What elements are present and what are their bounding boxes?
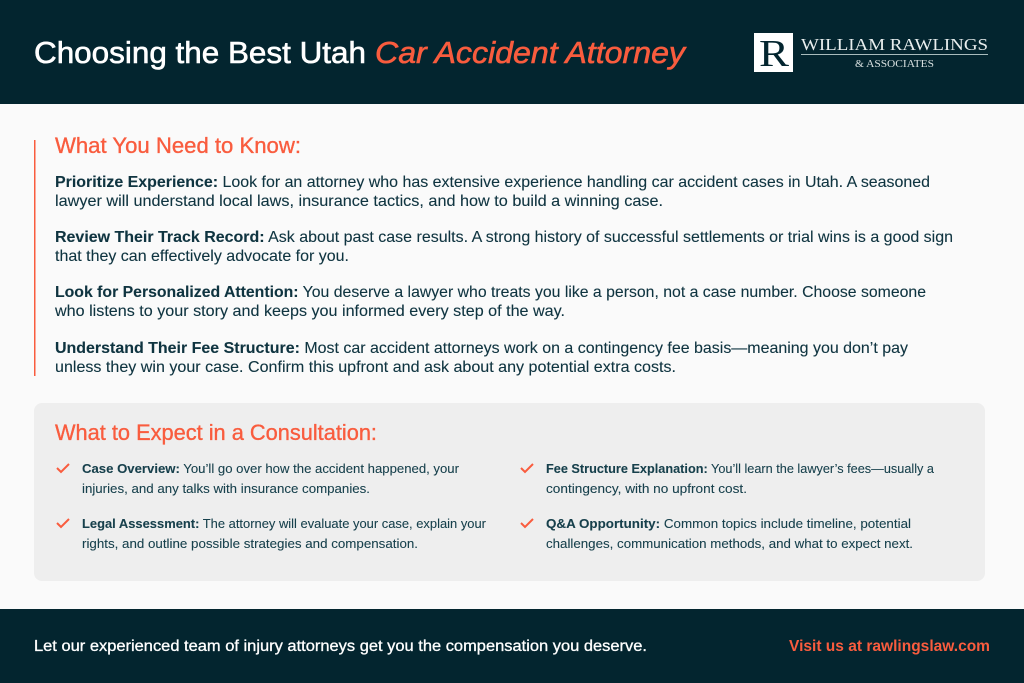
heading: What to Expect in a Consultation: [55,420,377,445]
item: case overview: Case Overview: You’ll go over how the accident happened, your [82,461,460,476]
item: q&a opportunity: challenges, communication methods, and what to expect next. [546,536,913,551]
item: prioritize experience [55,174,930,210]
title: Car Accident Attorney [375,35,688,70]
footer link: Visit us at rawlingslaw.com [789,638,990,655]
panel: what you need to know [34,133,953,376]
item: legal assessment [57,516,487,551]
item: fee structure explanation [521,461,935,496]
item: review track record: Review Their Track Record: Ask about past case results. A strong history of successful settlements or trial wins is a good sign [55,229,953,246]
item: prioritize experience: Prioritize Experience: Look for an attorney who has extensive experience handling car accident cases in Utah. A seasoned [55,174,930,191]
icon: check [521,519,533,527]
item: personalized attention: who listens to your story and keeps you informed every step of the way. [54,303,565,320]
item: fee structure explanation: contingency, with no upfront cost. [546,481,747,496]
accent rule [34,140,36,376]
item: personalized attention: Look for Personalized Attention: You deserve a lawyer who treats you like a person, not a case number. Choose someone [55,284,926,301]
footer message: Let our experienced team of injury attorneys get you the compensation you deserve. [34,638,647,655]
title: Choosing the Best Utah [34,35,366,70]
item: fee structure: unless they win your case. Confirm this upfront and ask about any potential extra costs. [55,359,676,376]
heading: What You Need to Know: [55,133,301,158]
panel: what to expect in a consultation [34,403,985,581]
icon: check [57,519,69,527]
item: fee structure [55,340,908,376]
header band [0,0,1024,104]
item: q&a opportunity [521,516,913,551]
logo: William Rawlings & Associates: WILLIAM RAWLINGS [801,35,988,54]
item: prioritize experience: lawyer will understand local laws, insurance tactics, and how to build a winning case. [55,193,663,210]
item: case overview: injuries, and any talks with insurance companies. [82,481,370,496]
item: fee structure: Understand Their Fee Structure: Most car accident attorneys work on a contingency fee basis—meaning you don’t pay [55,340,908,357]
item: review track record [55,229,953,265]
item: legal assessment: Legal Assessment: The attorney will evaluate your case, explain your [82,516,487,531]
item: fee structure explanation: Fee Structure Explanation: You’ll learn the lawyer’s fees—usually a [546,461,935,476]
item: case overview [57,461,460,496]
item: review track record: that they can effectively advocate for you. [55,248,349,265]
item: legal assessment: rights, and outline possible strategies and compensation. [82,536,418,551]
logo: William Rawlings & Associates [754,33,988,75]
item: q&a opportunity: Q&A Opportunity: Common topics include timeline, potential [546,516,911,531]
footer band [0,609,1024,683]
logo: William Rawlings & Associates: & ASSOCIATES [855,59,934,70]
title [34,35,688,70]
logo: William Rawlings & Associates: R [759,33,790,75]
item: personalized attention [54,284,926,320]
icon: check [57,464,69,472]
icon: check [521,464,533,472]
